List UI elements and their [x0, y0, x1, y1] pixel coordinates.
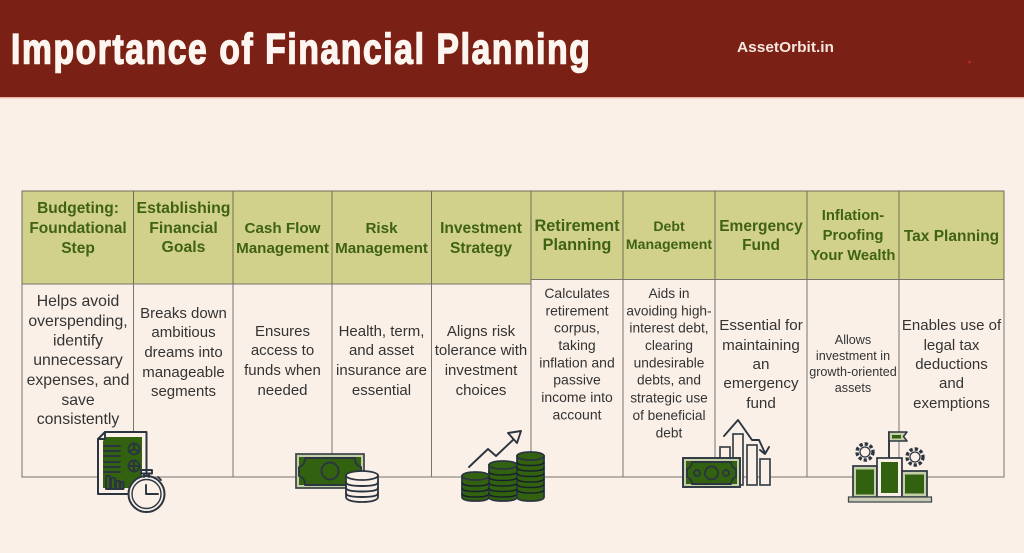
text: retirement: passive	[553, 372, 601, 388]
icon: budget document and stopwatch	[98, 432, 164, 512]
text: emergency fund: an	[753, 356, 769, 373]
text: investment: Aligns risk	[447, 323, 516, 340]
text: retirement: taking	[558, 337, 596, 353]
text: emergency fund: fund	[746, 395, 776, 412]
column: risk	[332, 191, 432, 477]
text: debt: avoiding high-	[626, 303, 712, 318]
icon: podium with flag and gears	[848, 432, 932, 502]
heading: emergency fund: Fund	[742, 237, 780, 254]
red dot	[968, 61, 971, 63]
text: cash flow: Ensures	[255, 323, 310, 340]
text: tax planning: and	[939, 375, 964, 392]
text: inflation: growth-oriented	[809, 365, 897, 379]
text: retirement: income into	[541, 389, 613, 405]
text: risk: essential	[352, 382, 411, 399]
text: risk: insurance are	[336, 362, 427, 379]
text: retirement: retirement	[545, 302, 609, 318]
column: financial goals	[134, 191, 233, 477]
text: budgeting: consistently	[37, 411, 119, 428]
text: cash flow: funds when	[244, 362, 321, 379]
text: debt: debt	[656, 426, 683, 440]
heading: tax planning: Tax Planning	[904, 228, 999, 245]
text: retirement: Calculates	[544, 285, 610, 301]
heading: budgeting: Budgeting:	[37, 200, 119, 217]
text: cash flow: access to	[251, 342, 314, 359]
heading: inflation: Inflation-	[822, 208, 884, 224]
heading: investment: Investment	[440, 220, 522, 237]
icon: coin stacks with growth arrow	[462, 431, 544, 501]
text: budgeting: overspending,	[28, 313, 128, 330]
column: debt	[623, 191, 715, 477]
heading: debt: Management	[626, 236, 712, 252]
text: budgeting: expenses, and	[27, 372, 129, 389]
heading: financial goals: Goals	[162, 239, 206, 256]
heading: risk: Management	[335, 240, 428, 257]
text: retirement: inflation and	[539, 354, 615, 370]
text: financial goals: Breaks down	[140, 305, 227, 322]
text: emergency fund: maintaining	[722, 337, 800, 354]
column: tax planning	[899, 191, 1004, 477]
column: retirement	[531, 191, 623, 477]
text: tax planning: exemptions	[913, 395, 990, 412]
text: investment: choices	[456, 382, 506, 399]
text: financial goals: dreams into	[144, 344, 223, 361]
text: retirement: corpus,	[554, 320, 600, 336]
text: financial goals: ambitious	[151, 324, 216, 341]
heading: budgeting: Foundational	[29, 220, 127, 237]
icon: banknote and coins	[296, 454, 378, 502]
heading: emergency fund: Emergency	[719, 218, 803, 235]
text: financial goals: manageable	[142, 364, 225, 381]
text: emergency fund: emergency	[723, 375, 799, 392]
heading: financial goals: Establishing	[137, 200, 230, 217]
heading: risk: Risk	[365, 220, 398, 237]
text: investment: tolerance with	[435, 342, 527, 359]
column: budgeting	[22, 191, 134, 477]
text: retirement: account	[552, 406, 602, 422]
text: debt: of beneficial	[632, 408, 706, 423]
text: inflation: Allows	[835, 333, 871, 347]
text: debt: debts, and	[637, 373, 701, 388]
header banner	[0, 0, 1024, 98]
text: debt: strategic use	[630, 390, 708, 406]
text: risk: and asset	[349, 342, 415, 359]
text: tax planning: deductions	[915, 356, 988, 373]
text: budgeting: save	[61, 392, 95, 409]
text: budgeting: Helps avoid	[37, 293, 119, 310]
text: inflation: investment in	[816, 349, 890, 363]
text: inflation: assets	[835, 381, 871, 395]
heading: cash flow: Cash Flow	[245, 220, 321, 237]
heading: inflation: Your Wealth	[811, 248, 895, 264]
brand label: AssetOrbit.in	[737, 39, 834, 56]
title: Importance of Financial Planning	[11, 26, 590, 74]
heading: retirement: Planning	[543, 236, 611, 254]
text: tax planning: legal tax	[924, 337, 980, 354]
heading: debt: Debt	[653, 218, 685, 234]
heading: cash flow: Management	[236, 240, 329, 257]
text: budgeting: identify	[53, 332, 103, 350]
heading: budgeting: Step	[61, 240, 95, 257]
text: risk: Health, term,	[339, 323, 424, 340]
heading: retirement: Retirement	[534, 217, 620, 235]
text: emergency fund: Essential for	[719, 317, 803, 334]
heading: financial goals: Financial	[149, 220, 218, 237]
column: investment	[432, 191, 531, 477]
column: emergency fund	[715, 191, 807, 477]
text: financial goals: segments	[151, 383, 216, 400]
text: tax planning: Enables use of	[902, 317, 1002, 334]
icon: banknote and bar chart with trend line	[683, 420, 770, 487]
text: debt: undesirable	[634, 355, 704, 370]
text: budgeting: unnecessary	[33, 352, 123, 369]
text: debt: interest debt,	[629, 321, 709, 336]
text: debt: clearing	[645, 338, 693, 353]
heading: investment: Strategy	[450, 240, 512, 257]
heading: inflation: Proofing	[823, 228, 883, 244]
column: cash flow	[233, 191, 332, 477]
text: debt: Aids in	[648, 286, 690, 301]
column: inflation	[807, 191, 899, 477]
text: cash flow: needed	[257, 382, 308, 399]
text: investment: investment	[445, 362, 518, 379]
